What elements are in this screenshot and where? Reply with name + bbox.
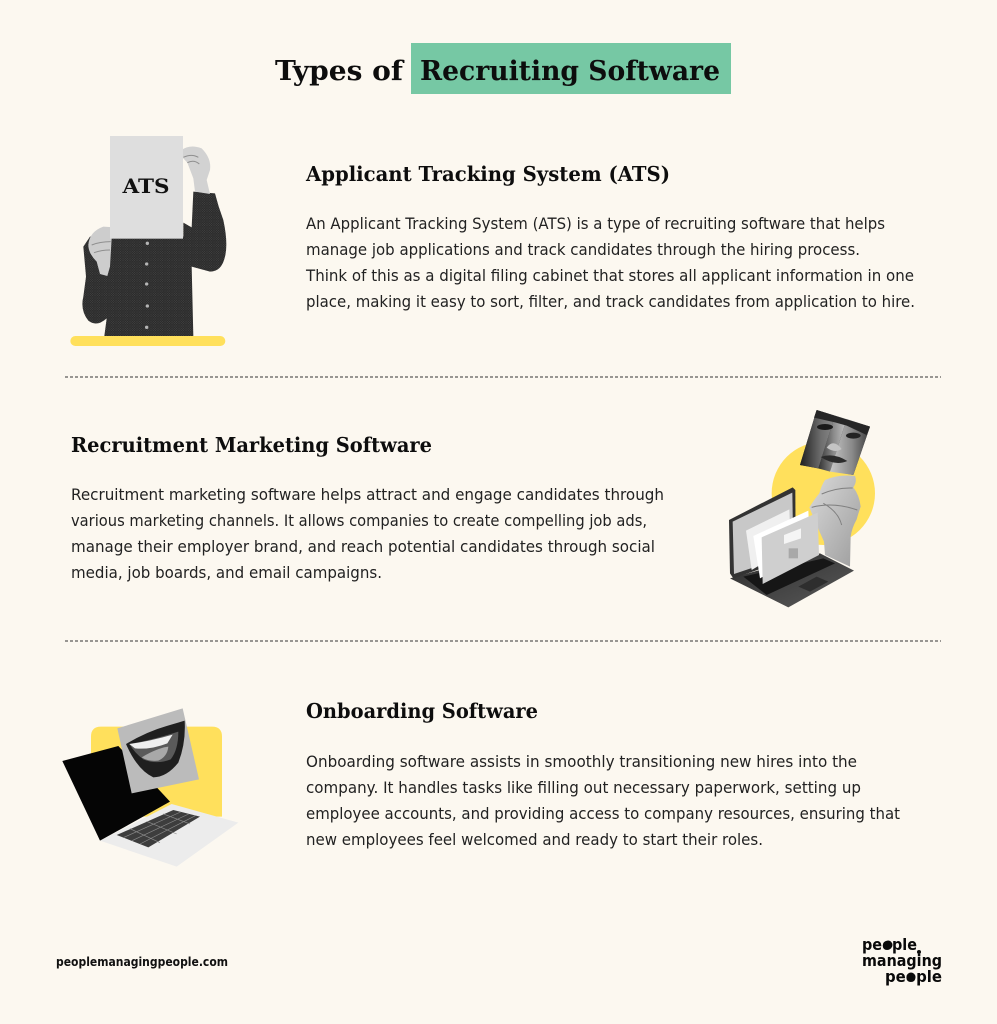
title: Types of <box>275 56 405 87</box>
description: media, job boards, and email campaigns. <box>71 563 382 582</box>
description: company. It handles tasks like filling out necessary paperwork, setting up <box>306 778 861 797</box>
description: Think of this as a digital filing cabinet that stores all applicant information in one <box>305 266 914 285</box>
lips <box>126 721 185 777</box>
panel: recruitment marketing software <box>71 410 875 607</box>
logo <box>862 935 942 986</box>
title <box>275 43 731 94</box>
yellow circle <box>772 442 875 545</box>
laptop base <box>730 553 854 607</box>
description <box>306 752 900 849</box>
logo: people <box>885 967 942 986</box>
heading: Applicant Tracking System (ATS) <box>305 162 670 186</box>
illustration: person holding ATS sign <box>70 136 226 346</box>
description: manage their employer brand, and reach potential candidates through social <box>71 537 655 556</box>
panel: onboarding software <box>62 699 900 867</box>
description: place, making it easy to sort, filter, and track candidates from application to hire. <box>306 292 915 311</box>
title highlight: Recruiting Software <box>420 56 720 87</box>
footer url: peoplemanagingpeople.com <box>56 954 228 969</box>
logo: managing <box>862 951 942 970</box>
description <box>305 214 915 311</box>
logo: people <box>862 935 917 954</box>
sign label: ATS <box>121 174 170 198</box>
heading: Onboarding Software <box>306 699 538 723</box>
illustration: laptop and hand holding photo <box>729 410 875 607</box>
mouth photo <box>117 708 199 793</box>
file windows <box>746 509 791 570</box>
left hand <box>88 227 115 276</box>
description: new employees feel welcomed and ready to start their roles. <box>306 830 763 849</box>
description <box>71 485 664 582</box>
description: An Applicant Tracking System (ATS) is a type of recruiting software that helps <box>306 214 885 233</box>
keyboard <box>117 810 200 847</box>
paper sign <box>110 136 183 239</box>
yellow rounded square <box>91 727 222 817</box>
illustration: laptop with mouth photo <box>62 708 238 867</box>
description: manage job applications and track candidates through the hiring process. <box>306 240 860 259</box>
description: Recruitment marketing software helps attract and engage candidates through <box>71 485 664 504</box>
laptop lid <box>729 487 796 578</box>
description: various marketing channels. It allows companies to create compelling job ads, <box>71 511 647 530</box>
laptop base <box>100 804 238 867</box>
panel: applicant tracking system <box>70 136 915 346</box>
right hand <box>182 147 210 194</box>
description: employee accounts, and providing access to company resources, ensuring that <box>306 804 900 823</box>
laptop screen <box>62 746 170 841</box>
heading: Recruitment Marketing Software <box>71 433 432 457</box>
shirt <box>82 192 226 336</box>
face photo <box>800 410 870 475</box>
yellow base bar <box>70 336 225 346</box>
shirt buttons <box>145 242 149 329</box>
hand <box>809 475 861 567</box>
title highlight <box>411 43 731 94</box>
description: Onboarding software assists in smoothly transitioning new hires into the <box>306 752 857 771</box>
